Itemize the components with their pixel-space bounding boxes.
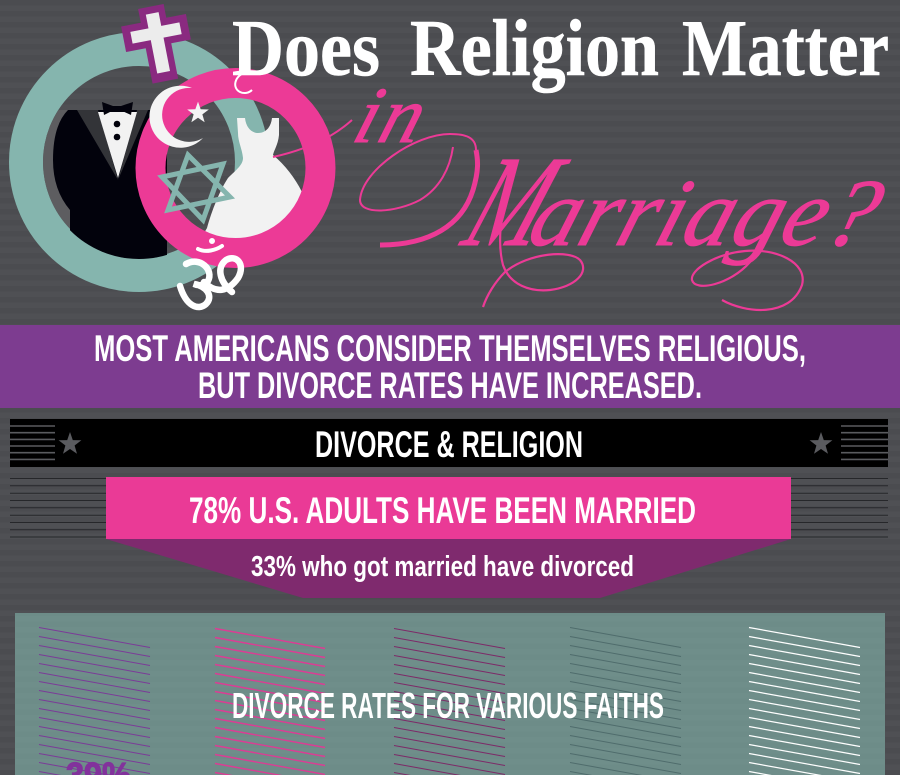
- icon: om symbol: [180, 240, 241, 307]
- callout: purple arrow with divorce statistic: 33% who got married have divorced: [251, 551, 634, 583]
- callout: purple arrow with divorce statistic: [106, 539, 791, 598]
- logo: wedding rings with couple and religious symbols: [26, 0, 352, 307]
- section heading text: DIVORCE & RELIGION: [315, 424, 583, 465]
- icon: right star: [810, 432, 832, 454]
- title: in Marriage?: M: [446, 131, 583, 274]
- icon: cross: [118, 0, 198, 87]
- title: in Marriage?: in: [344, 71, 441, 160]
- swash of the word in: [273, 120, 352, 157]
- groom tuxedo: [53, 102, 167, 265]
- hatched column: pink: [215, 628, 325, 775]
- icon: star of David: [162, 155, 230, 220]
- icon: crescent and star: [149, 86, 209, 148]
- teal wedding ring: [26, 49, 252, 275]
- hatched column: magenta: [394, 628, 505, 775]
- hatched column: dark teal: [570, 628, 681, 775]
- title: in Marriage?: [344, 71, 897, 310]
- bride dress: [200, 118, 302, 240]
- panel: divorce rates for various faiths: [15, 613, 885, 775]
- pink wedding ring: [150, 83, 320, 253]
- title: Does Religion Matter: Religion: [410, 5, 659, 93]
- hatched column: white: [749, 628, 860, 775]
- icon: left star: [59, 432, 81, 454]
- title: Does Religion Matter: [232, 5, 889, 93]
- title: in Marriage?: arriage?: [518, 160, 897, 266]
- title: Does Religion Matter: Does: [232, 5, 380, 93]
- grey ring interior: [43, 110, 70, 228]
- banner: purple subtitle: [0, 325, 900, 408]
- callout: pink married statistic: 78% U.S. ADULTS HAVE BEEN MARRIED: [189, 490, 696, 531]
- section header: divorce and religion: [10, 419, 888, 467]
- callout: pink married statistic: [106, 477, 791, 539]
- hatched column: purple: [39, 628, 150, 775]
